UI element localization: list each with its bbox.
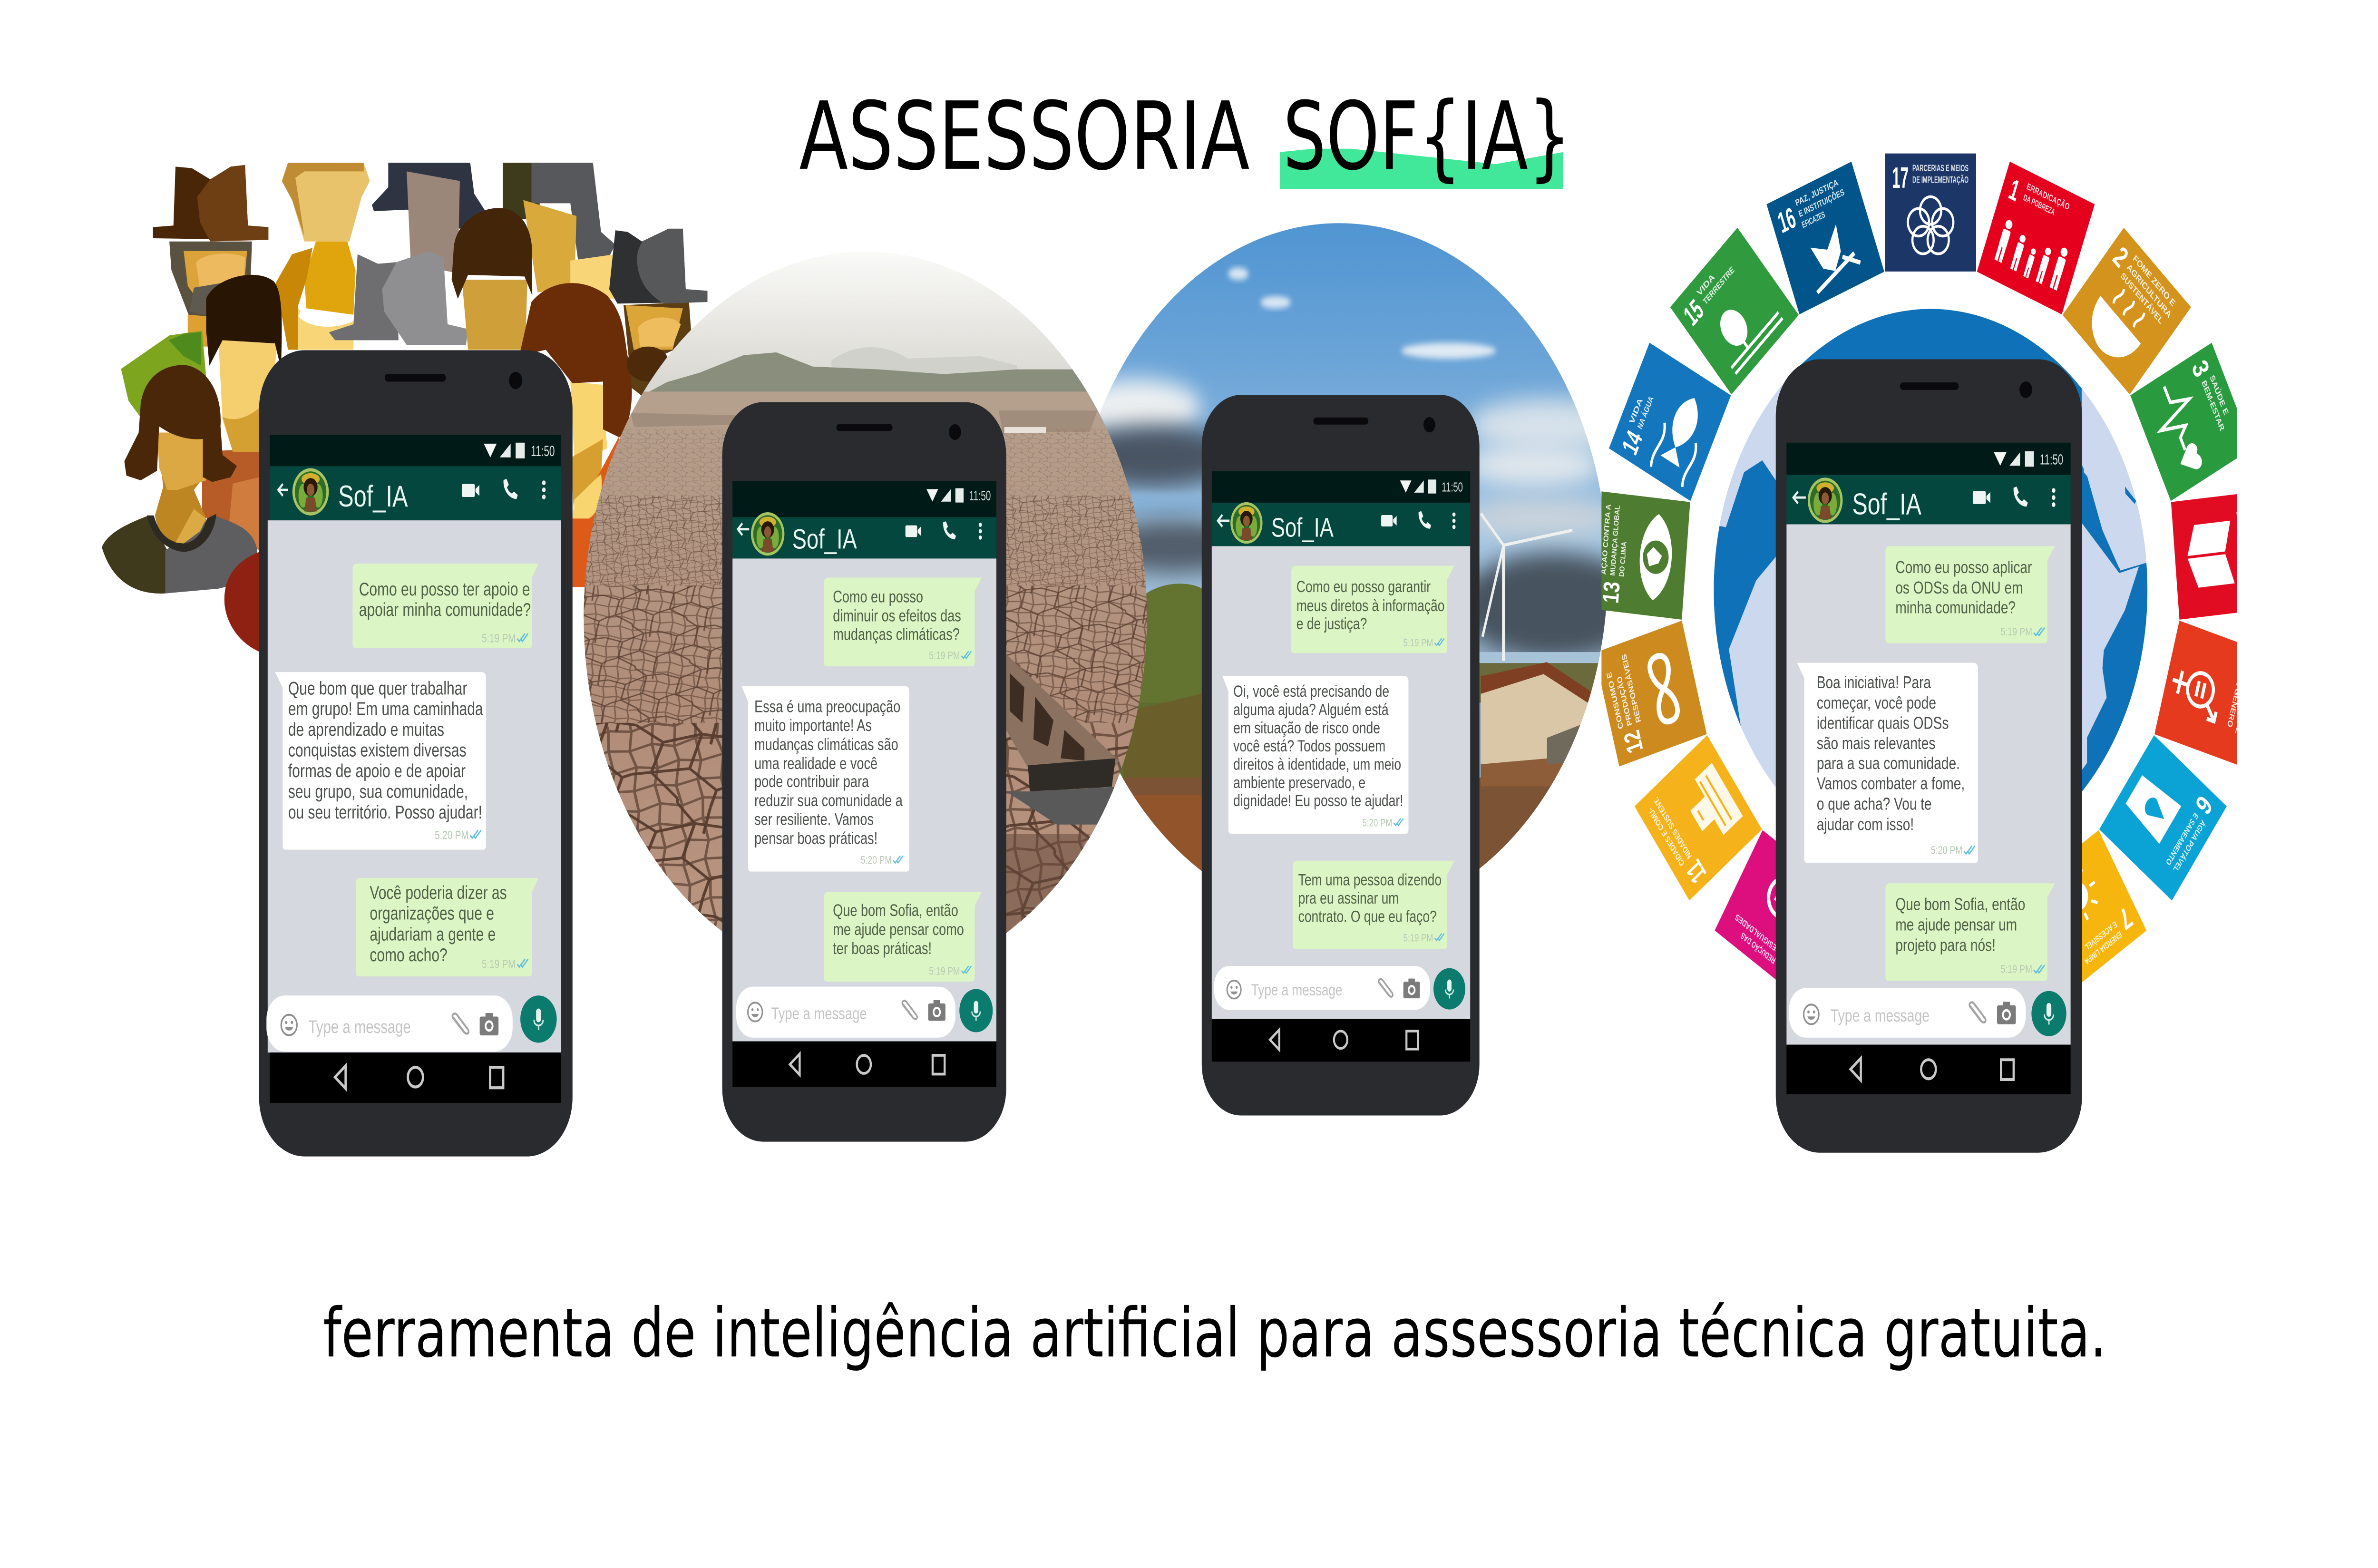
chat header: Sof_IA: [1271, 512, 1334, 543]
message: Sof_IA reply: Essa é uma preocupação: [754, 697, 900, 716]
mic button: [1433, 968, 1465, 1010]
message: Sof_IA reply: 5:20 PM: [1931, 844, 1962, 857]
SDG 17: PARCERIAS E MEIOS: [1912, 163, 1969, 173]
message: Sof_IA reply: muito importante! As: [754, 716, 872, 735]
message: Sof_IA reply: direitos à identidade, um meio: [1233, 755, 1401, 773]
SDG 7: [2021, 830, 2146, 993]
status bar: 11:50: [1442, 480, 1463, 495]
chat header: Sof_IA: [338, 479, 408, 513]
status bar: 11:50: [2040, 451, 2063, 467]
message: user follow-up: projeto para nós!: [1895, 935, 1996, 955]
message: user follow-up: organizações que e: [370, 904, 494, 924]
message: user question: minha comunidade?: [1895, 598, 2016, 617]
SDG 4: DE QUALIDADE: [2240, 523, 2251, 586]
message: user question: diminuir os efeitos das: [833, 606, 961, 625]
navigation bar: [1851, 1058, 2014, 1081]
message: Sof_IA reply: mudanças climáticas são: [754, 735, 898, 754]
message: Sof_IA reply: [1797, 663, 1978, 863]
message input: [1789, 988, 2026, 1038]
message: user question: 5:19 PM: [2000, 626, 2032, 638]
phone 3: rights chat: [1202, 395, 1480, 1116]
message: Sof_IA reply: começar, você pode: [1817, 693, 1936, 712]
SDG 16: E INSTITUIÇÕES: [1797, 186, 1845, 219]
message: Sof_IA reply: dignidade! Eu posso te ajudar!: [1233, 792, 1403, 810]
status bar: [1400, 479, 1463, 495]
chat header: [278, 468, 546, 516]
message: user question: Como eu posso ter apoio e: [359, 580, 530, 600]
message: Sof_IA reply: identificar quais ODSs: [1817, 713, 1949, 733]
SDG 12: RESPONSÁVEIS: [1620, 653, 1643, 724]
message: user follow-up: pra eu assinar um: [1298, 889, 1399, 907]
SDG 11: 11: [1681, 854, 1711, 889]
message: Sof_IA reply: [1222, 676, 1408, 834]
message: Sof_IA reply: Que bom que quer trabalhar: [288, 679, 467, 699]
SDG 4: 4: [2231, 502, 2257, 518]
SDG 1: [1977, 162, 2095, 314]
message: user follow-up: [1885, 883, 2055, 981]
photo: cracked dry earth: [584, 254, 1147, 933]
SDG 15: [1670, 228, 1799, 394]
chat header: [1793, 477, 2056, 523]
message: Sof_IA reply: de aprendizado e muitas: [288, 720, 444, 740]
navigation bar: [335, 1066, 503, 1089]
message: user follow-up: 5:19 PM: [2000, 963, 2032, 975]
message: user follow-up: 5:19 PM: [1403, 932, 1433, 944]
message: Sof_IA reply: reduzir sua comunidade a: [754, 791, 903, 810]
message: user question: meus diretos à informação: [1296, 597, 1444, 615]
SDG 5: [2154, 621, 2267, 767]
SDG 15: TERRESTRE: [1702, 265, 1736, 307]
SDG 5: DE GÉNERO: [2226, 672, 2245, 729]
mic button: [520, 995, 557, 1042]
globe: [1714, 309, 2148, 791]
SDG 2: SUSTENTÁVEL: [2119, 271, 2164, 326]
mic button: [959, 989, 993, 1032]
message: Sof_IA reply: 5:20 PM: [435, 828, 468, 842]
SDG 15: VIDA: [1696, 272, 1716, 298]
message: user question: 5:19 PM: [1403, 637, 1433, 649]
SDG 16: PAZ, JUSTIÇA: [1794, 177, 1840, 208]
SDG 15: 15: [1679, 293, 1708, 332]
message: user question: os ODSs da ONU em: [1895, 578, 2023, 597]
SDG 2: [2063, 228, 2191, 394]
message: user follow-up: me ajude pensar como: [833, 920, 964, 939]
message: Sof_IA reply: Boa iniciativa! Para: [1817, 673, 1931, 692]
message: user question: [824, 578, 982, 666]
message: Sof_IA reply: alguma ajuda? Alguém está: [1233, 701, 1389, 719]
message: user question: 5:19 PM: [482, 632, 516, 645]
message: user follow-up: contrato. O que eu faço?: [1298, 907, 1437, 925]
SDG 7: ENERGIA LIMPA: [2083, 929, 2123, 967]
SDG 17: DE IMPLEMENTAÇÃO: [1912, 175, 1969, 185]
message: Sof_IA reply: ambiente preservado, e: [1233, 774, 1365, 792]
mic button: [2031, 991, 2066, 1036]
message: user question: apoiar minha comunidade?: [359, 600, 531, 620]
message: user follow-up: me ajude pensar um: [1895, 915, 2017, 935]
SDG 13: [1591, 491, 1690, 620]
message: user follow-up: 5:19 PM: [929, 965, 960, 977]
chat header: [738, 512, 982, 555]
SDG 17: 17: [1892, 161, 1909, 195]
SDG 1: ERRADICAÇÃO: [2026, 181, 2071, 212]
SDG 14: 14: [1617, 425, 1647, 459]
SDG 5: IGUALDADE: [2233, 676, 2253, 735]
message: Sof_IA reply: Vamos combater a fome,: [1817, 774, 1965, 793]
message: Sof_IA reply: ser resiliente. Vamos: [754, 810, 874, 828]
message: Sof_IA reply: ou seu território. Posso ajudar!: [288, 802, 482, 823]
message: user question: Como eu posso garantir: [1296, 578, 1431, 596]
title: ASSESSORIA: [799, 81, 1250, 191]
message: user question: Como eu posso aplicar: [1895, 558, 2032, 577]
status bar: [926, 488, 991, 504]
SDG 13: 13: [1598, 580, 1625, 604]
message: Sof_IA reply: conquistas existem diversas: [288, 740, 467, 761]
message: user follow-up: [1293, 861, 1454, 949]
message: user follow-up: 5:19 PM: [482, 957, 516, 971]
message: user follow-up: ter boas práticas!: [833, 939, 932, 958]
status bar: [484, 443, 555, 459]
SDG 14: VIDA: [1628, 396, 1644, 426]
message: user question: [1291, 566, 1454, 653]
SDG 3: BEM-ESTAR: [2200, 379, 2226, 432]
status bar: 11:50: [969, 488, 991, 504]
message: Sof_IA reply: em situação de risco onde: [1233, 719, 1380, 737]
message: user question: e de justiça?: [1296, 615, 1367, 633]
SDG 10: DESIGUALDADES: [1734, 912, 1782, 956]
message input: Type a message: [309, 1017, 411, 1037]
chat header: Sof_IA: [1852, 487, 1921, 521]
message input: Type a message: [771, 1003, 867, 1023]
SDG 16: [1766, 162, 1884, 314]
message: Sof_IA reply: para a sua comunidade.: [1817, 754, 1960, 773]
SDG 2: FOME ZERO E: [2131, 253, 2177, 309]
SDG 11: NIDADES SUSTENT.: [1652, 795, 1693, 861]
SDG 1: DA POBREZA: [2022, 192, 2056, 217]
SDG 14: NA ÁGUA: [1636, 395, 1655, 431]
SDG 11: CIDADES E COMU-: [1647, 805, 1686, 868]
message input: Type a message: [1251, 982, 1342, 999]
phone 1: community chat: [259, 350, 573, 1157]
message: user follow-up: [356, 878, 538, 976]
SDG 12: 12: [1619, 727, 1648, 757]
SDG 3: [2130, 343, 2252, 501]
message: user follow-up: Que bom Sofia, então: [1895, 895, 2025, 914]
title: [799, 81, 1571, 191]
message: user follow-up: ajudariam a gente e: [370, 925, 496, 945]
message: user follow-up: Que bom Sofia, então: [833, 901, 958, 920]
SDG 13: DO CLIMA: [1618, 541, 1628, 577]
title: SOF{IA}: [1283, 81, 1571, 191]
message input: Type a message: [1831, 1006, 1930, 1025]
SDG 2: AGRICULTURA: [2125, 262, 2173, 320]
message: user question: [352, 564, 538, 648]
message: Sof_IA reply: 5:20 PM: [861, 855, 892, 867]
message: user question: Como eu posso: [833, 587, 923, 606]
SDG 16: 16: [1774, 201, 1799, 240]
SDG 1: 1: [2006, 173, 2023, 207]
SDG 11: [1635, 735, 1762, 901]
SDG 16: EFICAZES: [1801, 209, 1826, 230]
message: user follow-up: como acho?: [370, 945, 448, 965]
message: Sof_IA reply: Oi, você está precisando de: [1233, 682, 1389, 701]
message input: [266, 995, 513, 1052]
message: Sof_IA reply: 5:20 PM: [1362, 817, 1392, 829]
message: user question: mudanças climáticas?: [833, 625, 960, 643]
message: Sof_IA reply: seu grupo, sua comunidade,: [288, 782, 468, 802]
SDG 17: [1885, 154, 1976, 272]
SDG 4: [2171, 491, 2270, 620]
message: Sof_IA reply: são mais relevantes: [1817, 733, 1935, 753]
SDG 3: 3: [2187, 355, 2214, 382]
SDG 4: EDUCAÇÃO: [2249, 521, 2261, 577]
status bar: 11:50: [531, 443, 555, 459]
message: user follow-up: [824, 892, 982, 982]
status bar: [1994, 451, 2063, 467]
SDG 6: [2099, 735, 2227, 901]
photo: sky with wind turbine and house: [1100, 223, 1606, 871]
message: Sof_IA reply: o que acha? Vou te: [1817, 794, 1932, 814]
SDG 12: [1594, 621, 1707, 767]
SDG 12: CONSUMO E: [1605, 671, 1625, 730]
SDG 12: PRODUÇÃO: [1615, 675, 1634, 727]
SDG 10: REDUÇÃO DAS: [1739, 930, 1777, 966]
message: Sof_IA reply: pode contribuir para: [754, 772, 869, 791]
message: user question: [1885, 546, 2055, 643]
message: user follow-up: Você poderia dizer as: [370, 883, 507, 903]
SDG 6: 6: [2191, 789, 2217, 820]
SDG 6: E SANEAMENTO: [2164, 811, 2200, 867]
message: Sof_IA reply: [275, 672, 486, 850]
message: Sof_IA reply: em grupo! Em uma caminhada: [288, 699, 483, 720]
subtitle: ferramenta de inteligência artificial para assessoria técnica gratuita.: [323, 1294, 2106, 1373]
phone 2: climate chat: [722, 402, 1006, 1142]
SDG 10: [1715, 830, 1840, 993]
SDG 10: 10: [1776, 943, 1803, 982]
navigation bar: [1270, 1030, 1418, 1050]
chat header: [1218, 502, 1455, 544]
message: Sof_IA reply: formas de apoio e de apoiar: [288, 761, 466, 781]
chat header: Sof_IA: [792, 524, 857, 555]
illustration: crowd of people: [102, 162, 707, 652]
SDG 2: 2: [2108, 240, 2133, 274]
message: user follow-up: Tem uma pessoa dizendo: [1298, 871, 1442, 889]
illustration: UN SDG ring and globe: [1591, 154, 2270, 993]
message: user question: 5:19 PM: [929, 650, 960, 662]
phone 4: SDG chat: [1776, 359, 2082, 1153]
SDG 7: 7: [2115, 901, 2137, 936]
message: Sof_IA reply: pensar boas práticas!: [754, 829, 877, 848]
message: Sof_IA reply: uma realidade e você: [754, 754, 877, 773]
message: Sof_IA reply: você está? Todos possuem: [1233, 737, 1385, 755]
SDG 6: ÁGUA POTÁVEL: [2172, 818, 2207, 874]
message: Sof_IA reply: ajudar com isso!: [1817, 815, 1914, 834]
message: Sof_IA reply: [741, 686, 909, 872]
message input: [1214, 966, 1430, 1010]
SDG 7: E ACESSÍVEL: [2084, 919, 2118, 953]
SDG 13: AÇÃO CONTRA A: [1599, 504, 1612, 575]
message input: [736, 987, 955, 1038]
SDG 3: SAÚDE E: [2208, 373, 2230, 417]
SDG 14: [1609, 343, 1731, 501]
navigation bar: [790, 1054, 945, 1075]
SDG 5: 5: [2232, 651, 2259, 673]
SDG 13: MUDANÇA GLOBAL: [1608, 505, 1621, 576]
